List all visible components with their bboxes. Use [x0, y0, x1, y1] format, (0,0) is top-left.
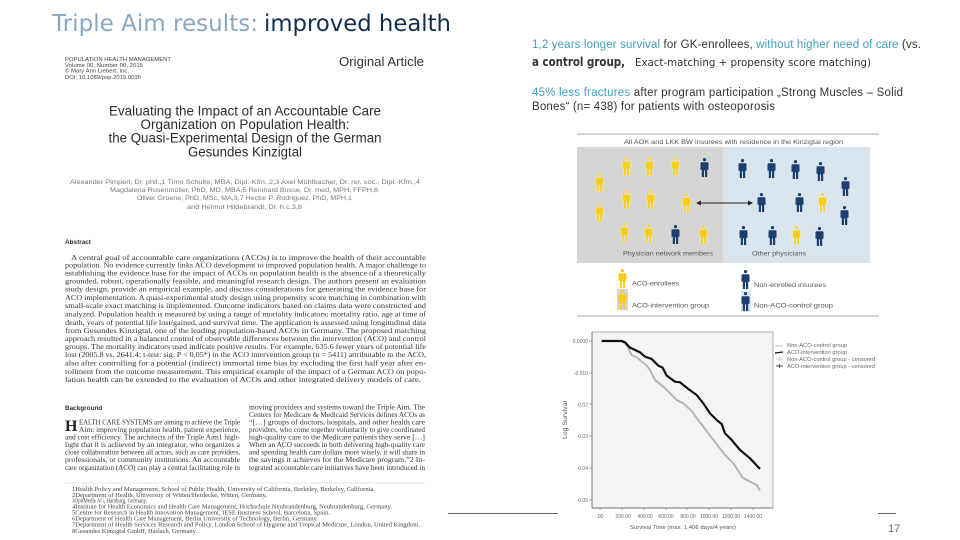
- background section, left column: professionals, or community institutions. An accountable: [65, 455, 241, 464]
- background section, right column: [249, 402, 426, 472]
- x axis labels: 1400.00: [744, 514, 762, 520]
- background section, left column: close collaboration between all actors, such as care providers,: [65, 448, 240, 456]
- authors: Magdalena Rosenmöller, PhD, MD, MBA,5 Reinhard Busse, Dr. med, MPH, FFPH,6: [110, 187, 378, 194]
- abstract: ACO implementation. A quasi-experimental study design using propensity score matching in combination with: [65, 293, 426, 302]
- x axis labels: [597, 514, 762, 531]
- background section, right column: moving providers and systems toward the Triple Aim. The: [249, 402, 426, 412]
- journal citation: Volume 00, Number 00, 2015: [65, 63, 143, 69]
- chart legend: ACO-intervention group: [787, 350, 847, 356]
- panel: physician network members: [577, 147, 723, 263]
- affiliations: 6Department of Health Care Management, Berlin University of Technology, Berlin, Germany.: [72, 516, 318, 522]
- abstract: [65, 239, 427, 384]
- legend: Non-enrolled insurees: [754, 283, 826, 289]
- abstract: lost (2005.8 vs. 2641.4; t-test: sig. P < 0.05*) in the ACO intervention group (n = 5411) attributable to the ACO,: [65, 350, 426, 359]
- background section, left column: [65, 405, 241, 472]
- y axis labels: -0.04: [577, 466, 588, 472]
- journal citation: POPULATION HEALTH MANAGEMENT: [65, 57, 172, 63]
- label: other physicians: Other physicians: [752, 252, 806, 258]
- text block: survival result: [532, 39, 921, 69]
- abstract: establishing the evidence base for the impact of ACOs on population health is the absence of a theoretically: [65, 268, 426, 278]
- abstract: death, years of potential life lost/gained, and survival time. The application is assessed using longitudinal data: [65, 318, 427, 327]
- abstract: also after controlling for a potential (indirect) immortal time bias by excluding the first half year after en-: [65, 358, 427, 368]
- affiliations: 2Department of Health, University of Witten/Herdecke, Witten, Germany.: [72, 492, 267, 499]
- background section, right column: Centers for Medicare & Medicaid Services defines ACOs as: [249, 410, 425, 419]
- background section, left column: H: [65, 418, 78, 435]
- text block: survival result: a control group,: [532, 55, 625, 69]
- legend: ACO-enrollees: [632, 282, 679, 288]
- footer rule, right segment: [878, 512, 896, 514]
- diagram heading: All AOK and LKK BW insurees with residence in the Kinzigtal region: [624, 140, 843, 146]
- journal citation: DOI: 10.1089/pop.2015.0036: [65, 75, 141, 81]
- icons: navy non-enrolled insurees: [672, 158, 850, 246]
- page number: 17: [888, 523, 900, 535]
- background section, right column: the savings it achieves for the Medicare program.”2 In-: [249, 455, 426, 464]
- title: [51, 11, 451, 37]
- y axis labels: -0.02: [577, 402, 588, 408]
- background section, left column: light that it is achieved by an integrator, who organizes a: [65, 440, 241, 449]
- legend: Non-ACO-control group: [754, 304, 834, 310]
- legend: [617, 269, 834, 312]
- article heading: the Quasi-Experimental Design of the German: [108, 130, 382, 146]
- text block: fractures result: [532, 87, 903, 113]
- y axis labels: [563, 339, 588, 504]
- x axis labels: 200.00: [615, 514, 631, 520]
- footer rule, left segment: [448, 512, 558, 514]
- text block: survival result: 1,2 years longer survival for GK-enrollees, without higher need of care (vs.: [532, 39, 921, 51]
- y axis labels: -0.05: [577, 498, 588, 504]
- affiliations: 7Department of Health Services Research and Policy, London School of Hygiene and Tropical Medicine, London, United Kingdom.: [72, 522, 420, 528]
- y axis labels: 0.0000: [573, 339, 588, 345]
- article heading: Organization on Population Health:: [140, 117, 350, 132]
- curve: control group: [602, 341, 760, 491]
- panel: other physicians: [723, 147, 870, 263]
- x axis labels: Survival Time (max. 1,406 days/4 years): [630, 525, 736, 531]
- abstract: rollment from the outcome measurement. This empirical example of the impact of a German ACO on popu-: [65, 367, 427, 376]
- background section, left column: care organization (ACO) can play a central facilitating role in: [65, 463, 240, 472]
- panel: journal article page: [65, 54, 427, 535]
- background section, right column: and spending health care dollars more wisely, it will share in: [249, 448, 425, 456]
- affiliations: 5Centre for Research in Health Innovation Management, IESE Business School, Barcelona, Spain.: [72, 510, 330, 516]
- article heading: Evaluating the Impact of an Accountable Care: [109, 104, 381, 118]
- x axis labels: 800.00: [680, 514, 696, 520]
- abstract: approach resulted in a balanced control of observable differences between the intervention (ACO) and control: [65, 334, 426, 343]
- background section, left column: and cost efficiency. The architects of the Triple Aim1 high-: [65, 432, 241, 442]
- abstract: A central goal of accountable care organizations (ACOs) is to improve the health of their accountable: [71, 253, 427, 262]
- abstract: study design, provide an empirical example, and discuss considerations for generating the evidence base for: [65, 284, 427, 294]
- text block: fractures result: 45% less fractures after program participation „Strong Muscles – Solid: [532, 87, 903, 99]
- background section, left column: Background: [65, 405, 102, 412]
- text block: survival result: Exact-matching + propensity score matching): [635, 57, 871, 69]
- abstract: small-scale exact matching is implemented. Outcome indicators based on claims data were constructed and: [65, 301, 426, 310]
- background section, right column: When an ACO succeeds in both delivering high-quality care: [249, 440, 426, 449]
- y axis labels: Log Survival: [563, 401, 569, 439]
- x axis labels: 400.00: [637, 514, 653, 520]
- background section, right column: tegrated accountable care initiatives have been introduced in: [249, 463, 425, 472]
- x axis labels: 600.00: [658, 514, 674, 520]
- journal citation: [65, 57, 172, 81]
- authors: Oliver Groene, PhD, MSc, MA,3,7 Hector P. Rodriguez, PhD, MPH,1: [137, 195, 352, 202]
- abstract: population. No evidence currently links ACO development to improved population health. A major challenge to: [65, 260, 426, 270]
- y axis labels: -0.010: [574, 371, 588, 377]
- x axis labels: .00: [597, 514, 604, 520]
- chart legend: [775, 343, 875, 370]
- plot area: [592, 332, 773, 508]
- icons: yellow ACO enrollees: [596, 157, 826, 245]
- study design diagram: [577, 134, 879, 316]
- article type label: Original Article: [339, 54, 424, 69]
- title: improved health: [264, 11, 451, 37]
- y axis labels: -0.03: [577, 434, 588, 440]
- chart legend: Non-ACO-control group - censored: [787, 357, 875, 363]
- article heading: [108, 104, 382, 160]
- chart legend: Non-ACO-control group: [787, 343, 847, 349]
- article heading: Gesundes Kinzigtal: [188, 144, 302, 160]
- background section, left column: EALTH CARE SYSTEMS are aiming to achieve the Triple: [79, 418, 241, 426]
- title: Triple Aim results:: [51, 11, 258, 37]
- x axis labels: 1200.00: [722, 514, 740, 520]
- text block: fractures result: Bones“ (n= 438) for patients with osteoporosis: [532, 101, 775, 113]
- background section, right column: high-quality care to the Medicare patients they serve […]: [249, 432, 425, 442]
- x axis labels: 1000.00: [700, 514, 718, 520]
- abstract: grounded, robust, operationally feasible, and meaningful research design. The authors present an evaluation: [65, 276, 426, 286]
- abstract: analyzed. Population health is measured by using a range of mortality indicators: mortality ratio, age at time of: [65, 310, 427, 318]
- authors: [70, 179, 420, 211]
- label: physician network members: Physician network members: [623, 252, 713, 258]
- abstract: Abstract: [65, 239, 92, 246]
- affiliations: 3OptiMedis AG, Hamburg, Germany.: [72, 498, 147, 504]
- background section, right column: providers, who come together voluntarily to give coordinated: [249, 425, 425, 434]
- abstract: groups. The mortality indicators used indicate positive results. For example, 635.6 fewer years of potential life: [65, 342, 427, 351]
- affiliations: 8Gesundes Kinzigtal GmbH, Haslach, Germany.: [72, 528, 197, 535]
- background section, right column: “[…] groups of doctors, hospitals, and other health care: [249, 418, 426, 426]
- abstract: from Gesundes Kinzigtal, one of the leading population-based ACOs in Germany. The proposed matching: [65, 326, 426, 335]
- curve: intervention group: [602, 341, 760, 469]
- affiliations: 4Institute for Health Economics and Health Care Management, Hochschule Neubrandenburg, Neubrandenburg, Germany.: [72, 504, 392, 510]
- background section, left column: Aim: improving population health, patient experience,: [79, 425, 240, 434]
- chart legend: ACO-intervention group - censored: [787, 364, 875, 370]
- arrow: comparison between groups: [696, 200, 753, 206]
- abstract: lation health can be extended to the evaluation of ACOs and other integrated delivery models of care.: [65, 375, 421, 384]
- affiliations: 1Health Policy and Management, School of Public Health, University of California, Berkeley, Berkeley, California.: [72, 486, 375, 493]
- survival chart: [563, 332, 875, 531]
- affiliations: [72, 486, 420, 535]
- authors: Alexander Pimperl, Dr. phil.,1 Timo Schulte, MBA, Dipl.-Kfm.,2,3 Axel Mühlbacher, Dr. rer. soc., Dipl.-Kfm.,4: [70, 179, 420, 186]
- journal citation: © Mary Ann Liebert, Inc.: [65, 68, 129, 74]
- authors: and Helmut Hildebrandt, Dr. h.c.3,8: [187, 204, 302, 211]
- legend: ACO-intervention group: [632, 304, 710, 310]
